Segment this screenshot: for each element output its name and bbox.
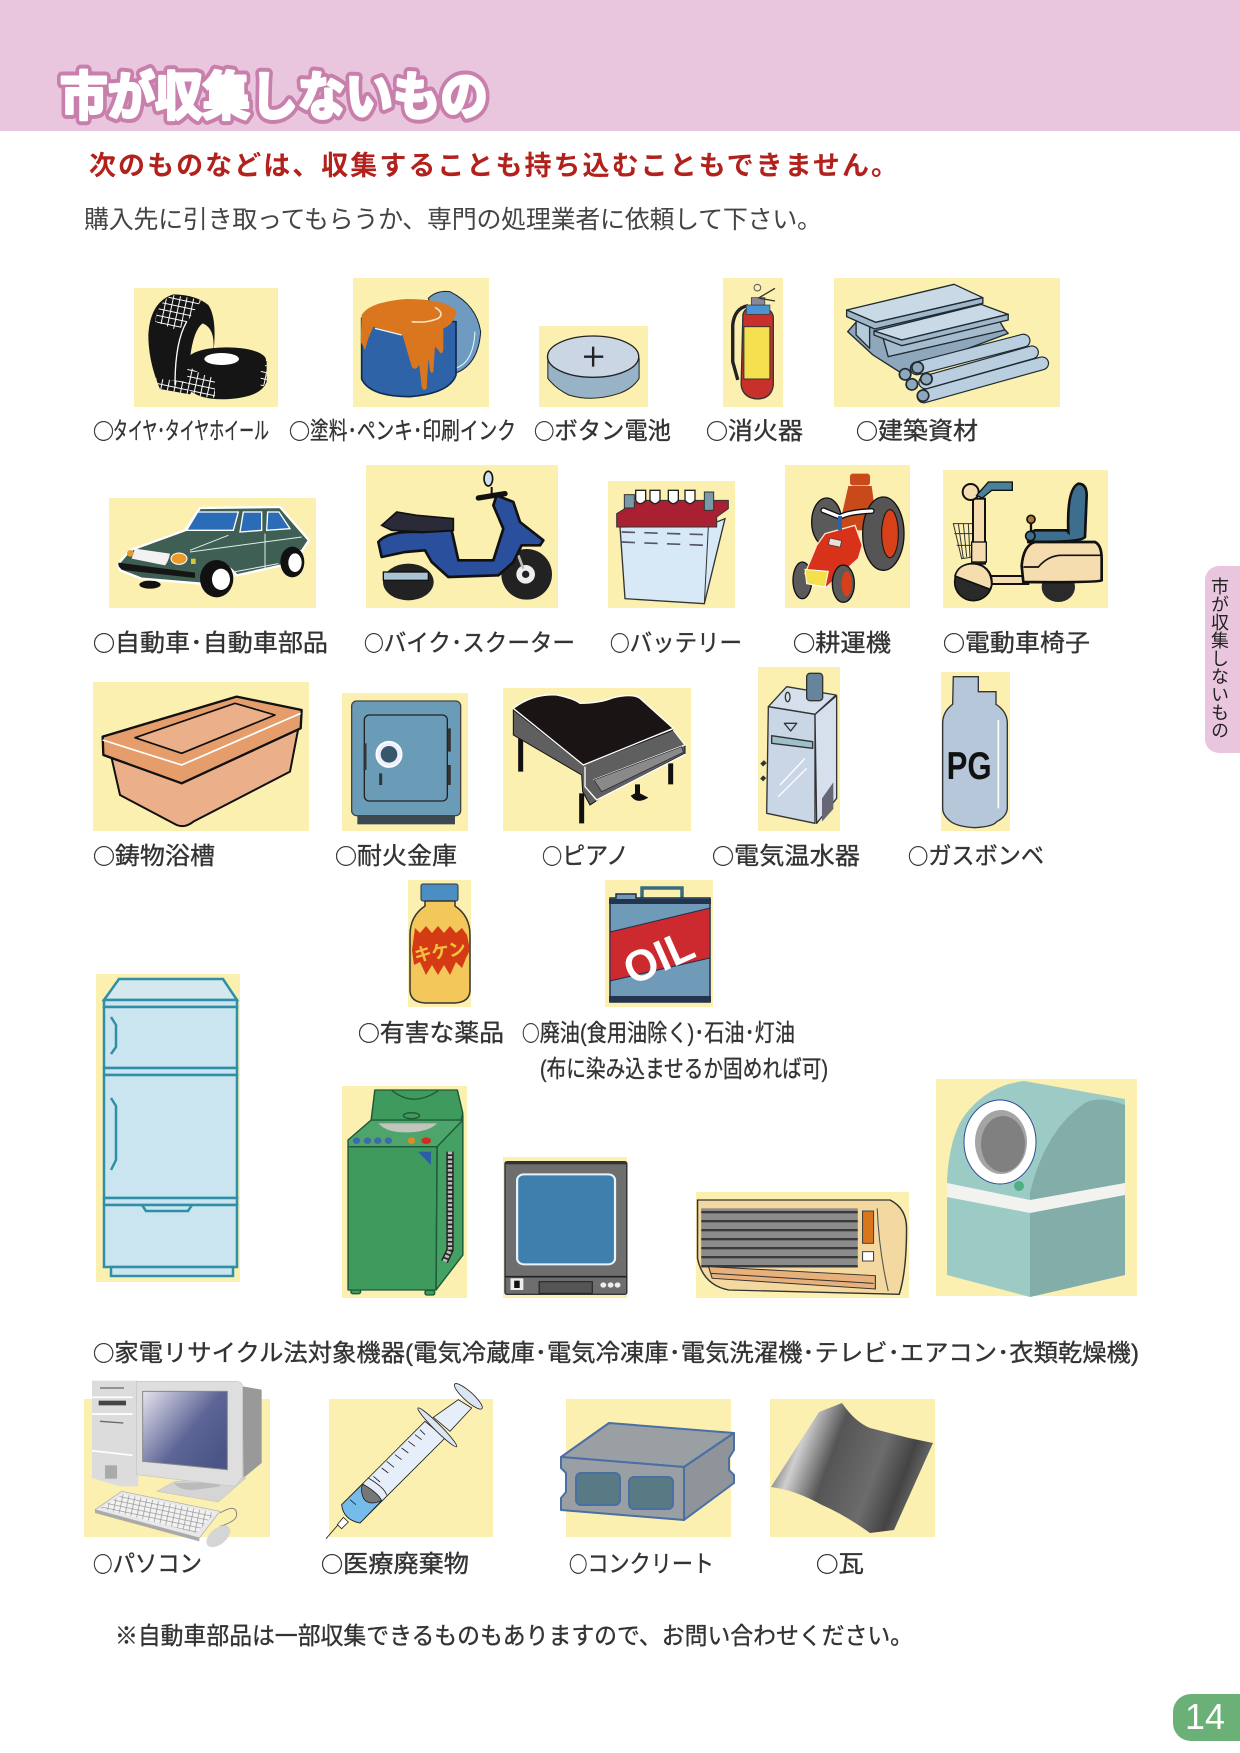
label: ○ガスボンベ [908,841,1044,871]
icon: concrete block [561,1423,734,1520]
swatch [342,693,468,831]
icon: clothes dryer [947,1081,1125,1297]
icon: building materials [847,284,1042,401]
icon: tile [771,1403,933,1533]
item: medical waste [321,1381,493,1579]
label: ○建築資材 [856,416,978,446]
item: electric wheelchair [943,470,1108,658]
icon: oil can [609,888,711,1002]
label: ○医療廃棄物 [321,1549,469,1579]
item: water heater [712,667,860,871]
swatch [941,672,1010,831]
swatch [943,470,1108,608]
item: building materials [834,278,1060,446]
label: ○電動車椅子 [943,628,1090,658]
swatch [109,498,316,608]
swatch [785,465,910,608]
swatch [134,288,278,407]
swatch [366,465,558,608]
tab text: 市が収集しないもの [1209,577,1229,739]
swatch [503,688,691,831]
sub label: (布に染み込ませるか固めれば可) [540,1056,828,1083]
label: ○家電リサイクル法対象機器(電気冷蔵庫･電気冷凍庫･電気洗濯機･テレビ･エアコン･衣類乾燥機) [93,1338,1139,1368]
label: ○ボタン電池 [534,416,671,446]
label: ○耕運機 [793,628,891,658]
icon: electric wheelchair [953,482,1102,602]
label [93,416,269,446]
label: ○コンクリート [569,1549,714,1579]
label: 塗料･ペンキ･印刷インク [310,418,516,445]
icon: gas cylinder [943,677,1007,828]
swatch [605,880,713,1007]
icon: scooter [378,471,552,600]
title: 市が収集しないもの [60,69,488,127]
swatch [566,1399,731,1537]
header band [0,0,1240,131]
icon: car [118,507,309,597]
item: cultivator [785,465,910,658]
icon: paint can [361,291,481,397]
label: ○ピアノ [542,841,629,871]
item: car [93,498,328,658]
icon: air conditioner [698,1200,907,1294]
icon: gas cylinder: PG [947,744,992,788]
page number [1173,1694,1240,1741]
icon: refrigerator [104,979,237,1276]
footnote: ※自動車部品は一部収集できるものもありますので、お問い合わせください。 [115,1623,913,1650]
swatch: television [503,1157,627,1298]
swatch [758,667,840,831]
icon: button battery [548,336,639,398]
swatch [329,1399,493,1537]
label: ○鋳物浴槽 [93,841,215,871]
icon: washer [348,1090,463,1295]
item: fireproof safe [335,693,468,871]
item: tires [93,288,278,446]
label: タイヤ･タイヤホイール [113,418,269,445]
icon: cultivator [793,474,904,602]
label: ○耐火金庫 [335,841,457,871]
label: ○バイク･スクーター [364,628,575,658]
swatch [353,278,489,407]
swatch [408,880,471,1007]
swatch: refrigerator [96,974,240,1282]
label: ○瓦 [816,1549,864,1579]
swatch [539,326,648,407]
label: ○廃油(食用油除く)･石油･灯油 [522,1018,795,1048]
icon: oil can: OIL [616,921,702,995]
item: roof tile [770,1399,935,1579]
item: extinguisher [706,278,803,446]
icon: bathtub [103,697,302,826]
swatch [93,682,309,831]
icon: syringe [326,1381,485,1539]
swatch [608,481,735,608]
icon: computer [92,1381,262,1551]
label: ○自動車･自動車部品 [93,628,328,658]
swatch [834,278,1060,407]
title: 市が収集しないもの [60,69,488,127]
swatch [84,1399,270,1537]
instruction text: 購入先に引き取ってもらうか、専門の処理業者に依頼して下さい。 [84,206,822,234]
number: 14 [1185,1696,1225,1737]
item: piano [503,688,691,871]
icon: bottle [410,884,470,1003]
label: ○電気温水器 [712,841,860,871]
subheading: red warning: 次のものなどは、収集することも持ち込むこともできません。 [89,151,898,181]
icon: car battery [617,490,728,604]
swatch [723,278,783,407]
badge [1173,1694,1240,1741]
item: personal computer [84,1381,270,1579]
icon: tires [148,294,267,399]
label: ○消火器 [706,416,803,446]
label: ○ [93,416,114,446]
item: button battery [534,326,671,446]
label: ○パソコン [93,1549,202,1579]
swatch: washer [342,1086,467,1298]
icon: fire extinguisher [733,284,775,399]
swatch: dryer [936,1079,1137,1296]
item: scooter [364,465,575,658]
item: cast-iron bathtub [93,682,309,871]
tab background [1205,566,1240,753]
item: paint [289,278,516,446]
icon: television [505,1162,627,1294]
label [289,416,516,446]
label: ○バッテリー [610,628,742,658]
icon: safe [352,701,461,824]
icon: piano [513,695,685,823]
item: concrete [561,1399,734,1579]
icon: water heater [762,673,837,823]
item: hazardous chemicals [358,880,504,1048]
item: waste oil [522,880,828,1083]
icon: bottle: キケン [413,938,467,966]
item: home appliances [93,974,1139,1368]
label: ○有害な薬品 [358,1018,504,1048]
label: ○ [289,416,310,446]
side tab [1205,566,1240,753]
swatch [770,1399,935,1537]
swatch: air conditioner [696,1192,909,1298]
item: gas cylinder [908,672,1044,871]
item: car battery [608,481,742,658]
